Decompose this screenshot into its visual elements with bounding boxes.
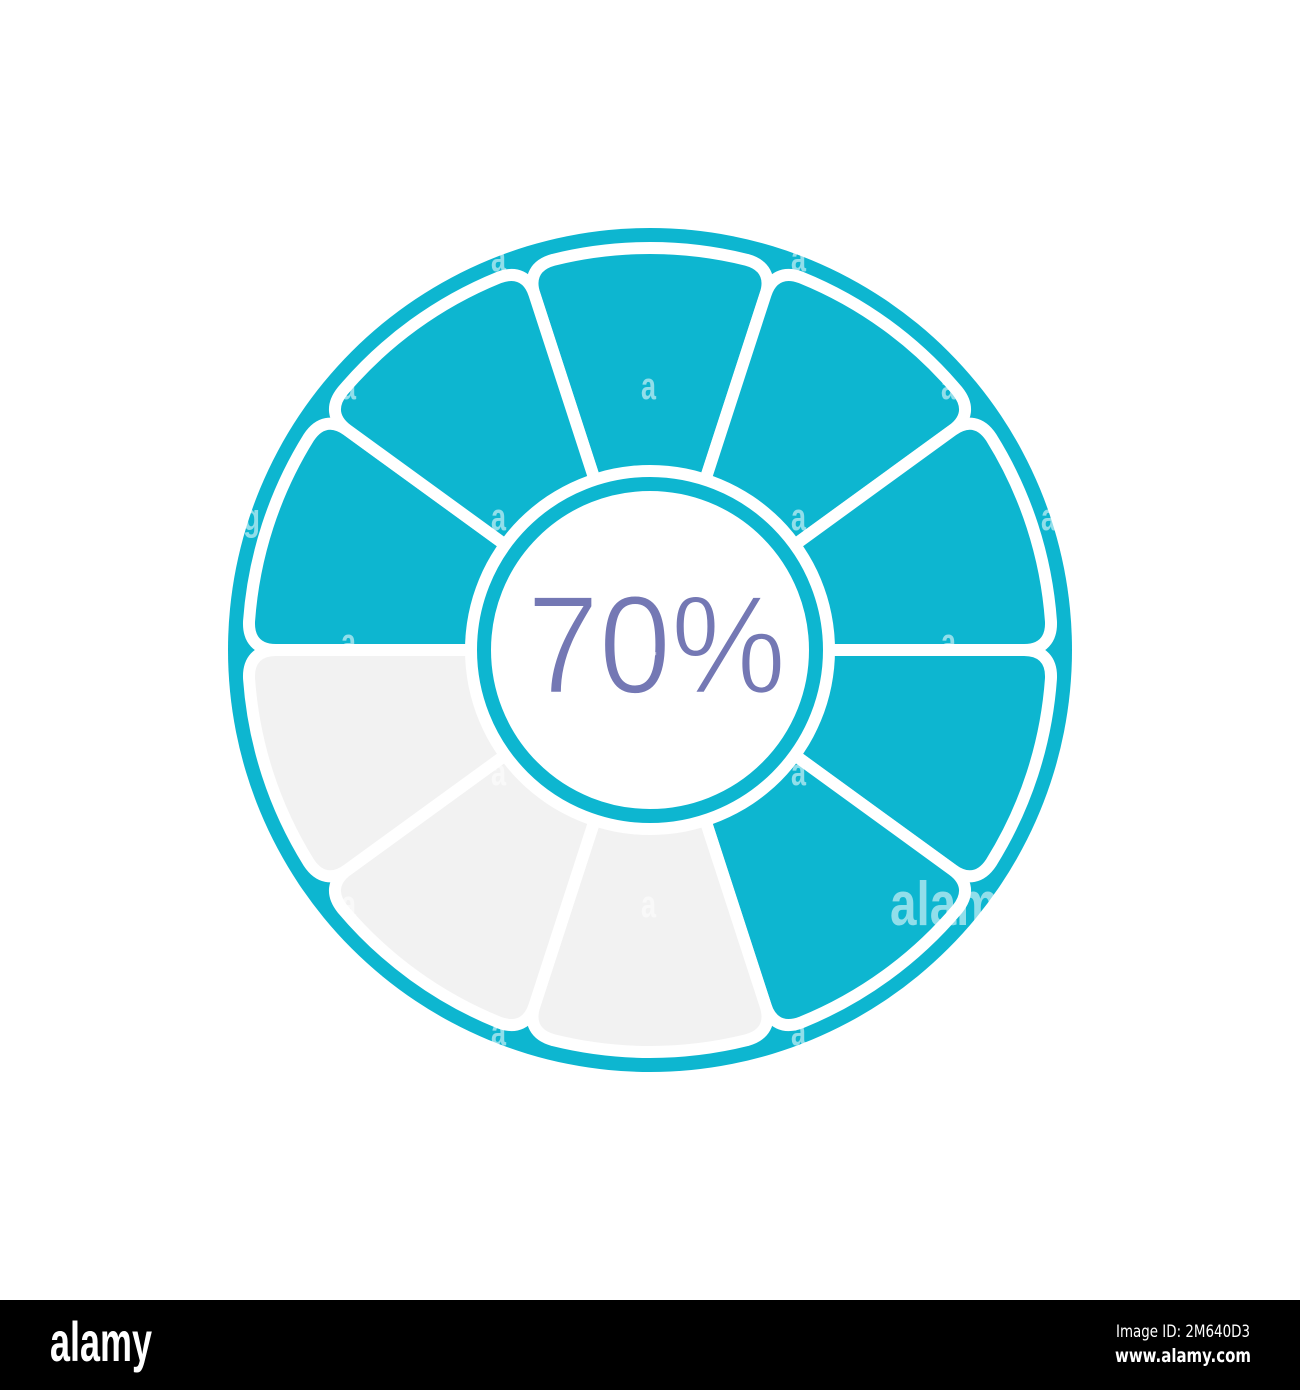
watermark marks: g (243, 497, 260, 539)
website url: www.alamy.com (1115, 1345, 1251, 1367)
watermark marks: a (791, 752, 807, 794)
watermark marks: a (491, 238, 507, 280)
segment 8 empty (239, 597, 520, 878)
segment 5 filled (661, 724, 973, 1036)
segments ring (239, 254, 1061, 1046)
segment 9 filled (239, 422, 520, 703)
percentage label: 70% (527, 566, 786, 723)
watermark marks: a (341, 884, 357, 926)
segment 6 empty (538, 823, 762, 1046)
watermark marks: a (341, 622, 357, 664)
segment 4 filled (780, 597, 1061, 878)
segment 2 filled (661, 264, 973, 576)
watermark marks: a (941, 622, 957, 664)
watermark marks: a (491, 497, 507, 539)
watermark marks: a (1041, 497, 1057, 539)
watermark marks: a (491, 1012, 507, 1054)
center hub ring (484, 484, 816, 816)
segment 3 filled (780, 422, 1061, 703)
center hub halo (465, 465, 835, 835)
segment 7 empty (327, 724, 639, 1036)
watermark marks: a (641, 366, 657, 408)
footer logo: alamy (50, 1310, 152, 1373)
watermark marks: a (941, 366, 957, 408)
footer bar (0, 1300, 1300, 1390)
watermark marks: a (491, 752, 507, 794)
watermark marks: alamy (890, 870, 1025, 939)
segment 1 filled (538, 254, 762, 477)
watermark marks (243, 238, 1057, 1054)
watermark marks: a (641, 884, 657, 926)
watermark marks: a (791, 238, 807, 280)
watermark marks: a (341, 366, 357, 408)
watermark marks: a (791, 497, 807, 539)
outer teal disc (228, 228, 1072, 1072)
image id: Image ID: 2M640D3 (1116, 1322, 1250, 1342)
segment 10 filled (327, 264, 639, 576)
watermark marks: a (791, 1012, 807, 1054)
donut progress gauge (228, 228, 1072, 1072)
watermark marks: a (641, 622, 657, 664)
